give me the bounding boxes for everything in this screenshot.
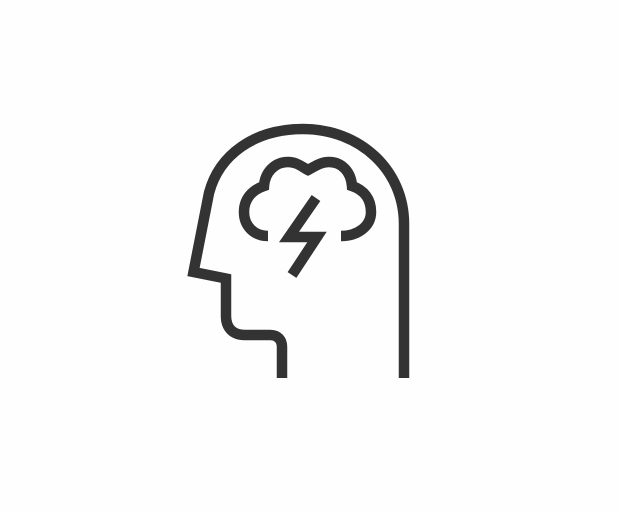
lightning bolt (289, 198, 317, 275)
storm cloud (244, 162, 371, 236)
head outline (194, 129, 404, 378)
